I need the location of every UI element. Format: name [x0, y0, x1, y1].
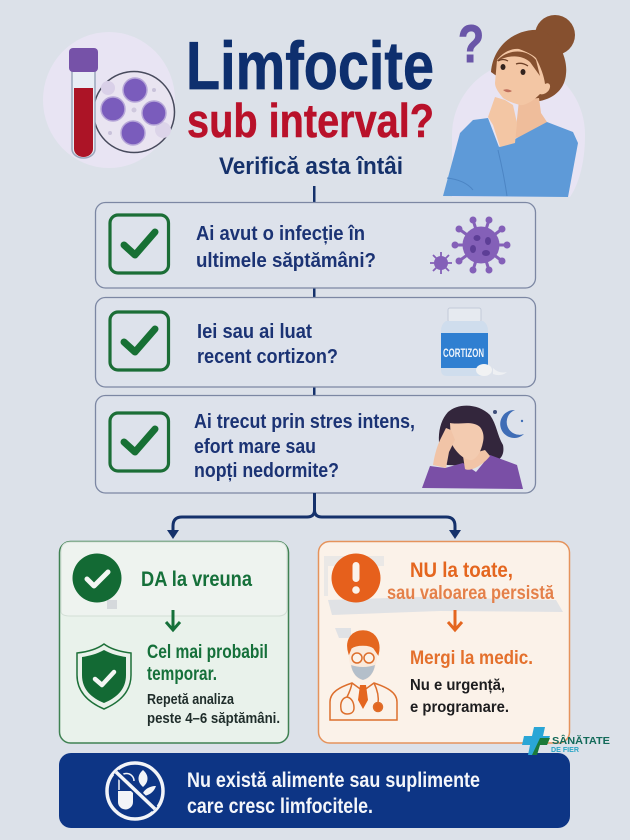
result text: e programare. — [410, 699, 509, 716]
result text — [147, 642, 280, 727]
eyes and mouth — [498, 60, 528, 92]
banner text: care cresc limfocitele. — [187, 795, 373, 818]
heading: check first: Verifică asta întâi — [219, 153, 403, 180]
banner: supplements note — [59, 753, 570, 828]
panel: yes outcome — [60, 542, 288, 743]
connector line — [313, 186, 316, 395]
sweater — [443, 118, 578, 197]
result text: Mergi la medic. — [410, 648, 533, 669]
icon: green checkbox — [110, 312, 168, 370]
icon: doctor — [330, 631, 397, 720]
question text: ultimele săptămâni? — [196, 250, 376, 272]
question text: Iei sau ai luat — [197, 321, 312, 343]
panel: cortisone question — [96, 298, 536, 387]
icon: shield — [77, 644, 131, 709]
question text — [196, 223, 376, 272]
heading — [387, 559, 554, 604]
heading: sau valoarea persistă — [387, 583, 554, 604]
icon: no pills or plants — [107, 763, 163, 819]
icon: green checkbox — [110, 215, 168, 273]
panel: stress question — [96, 396, 536, 493]
arrow — [448, 610, 462, 630]
logo: Sănătate de Fier — [522, 727, 610, 755]
neck — [515, 98, 547, 138]
illustration: thinking woman — [443, 15, 585, 197]
face — [495, 49, 550, 105]
subtitle: sub interval? — [187, 94, 434, 147]
result text: temporar. — [147, 664, 217, 685]
result text — [410, 648, 533, 716]
hair — [491, 15, 575, 101]
icon: cortizon bottle — [441, 308, 507, 376]
logo: Sănătate de Fier: SÂNĂTATE — [552, 734, 610, 747]
icon: blood test tube — [69, 48, 98, 158]
banner text — [187, 769, 480, 818]
icon: moon and star — [500, 410, 524, 438]
icon: viruses — [430, 216, 510, 274]
result text: Cel mai probabil — [147, 642, 268, 663]
result text: Nu e urgență, — [410, 677, 505, 694]
icon: cortizon bottle: CORTIZON — [443, 346, 484, 360]
heading: NU la toate, — [410, 559, 513, 582]
icon: green checkbox — [110, 413, 168, 471]
result text: peste 4–6 săptămâni. — [147, 711, 280, 727]
panel: no outcome — [318, 542, 570, 743]
question text: efort mare sau — [194, 436, 316, 458]
icon: exclamation circle — [332, 554, 380, 602]
heading: DA la vreuna — [141, 568, 252, 591]
arrow — [166, 610, 180, 630]
hand — [488, 97, 517, 147]
question text: nopți nedormite? — [194, 460, 339, 482]
logo: Sănătate de Fier: DE FIER — [551, 745, 580, 754]
title: Limfocite — [186, 28, 434, 104]
icon: green check circle — [72, 554, 122, 602]
question text: Ai trecut prin stres intens, — [194, 411, 415, 433]
question text: Ai avut o infecție în — [196, 223, 365, 245]
illustration: blood tube and lymphocytes — [43, 32, 175, 168]
banner text: Nu există alimente sau suplimente — [187, 769, 480, 792]
arrow: branching connector — [167, 493, 461, 539]
panel: infection question — [96, 202, 536, 288]
question text — [197, 321, 338, 368]
title — [186, 28, 434, 147]
question text — [194, 411, 415, 482]
result text: Repetă analiza — [147, 692, 235, 708]
question text: recent cortizon? — [197, 346, 338, 368]
icon: lymphocyte microscope view — [94, 72, 174, 152]
icon: question mark: ? — [458, 15, 484, 74]
illustration: tired woman — [422, 406, 524, 489]
